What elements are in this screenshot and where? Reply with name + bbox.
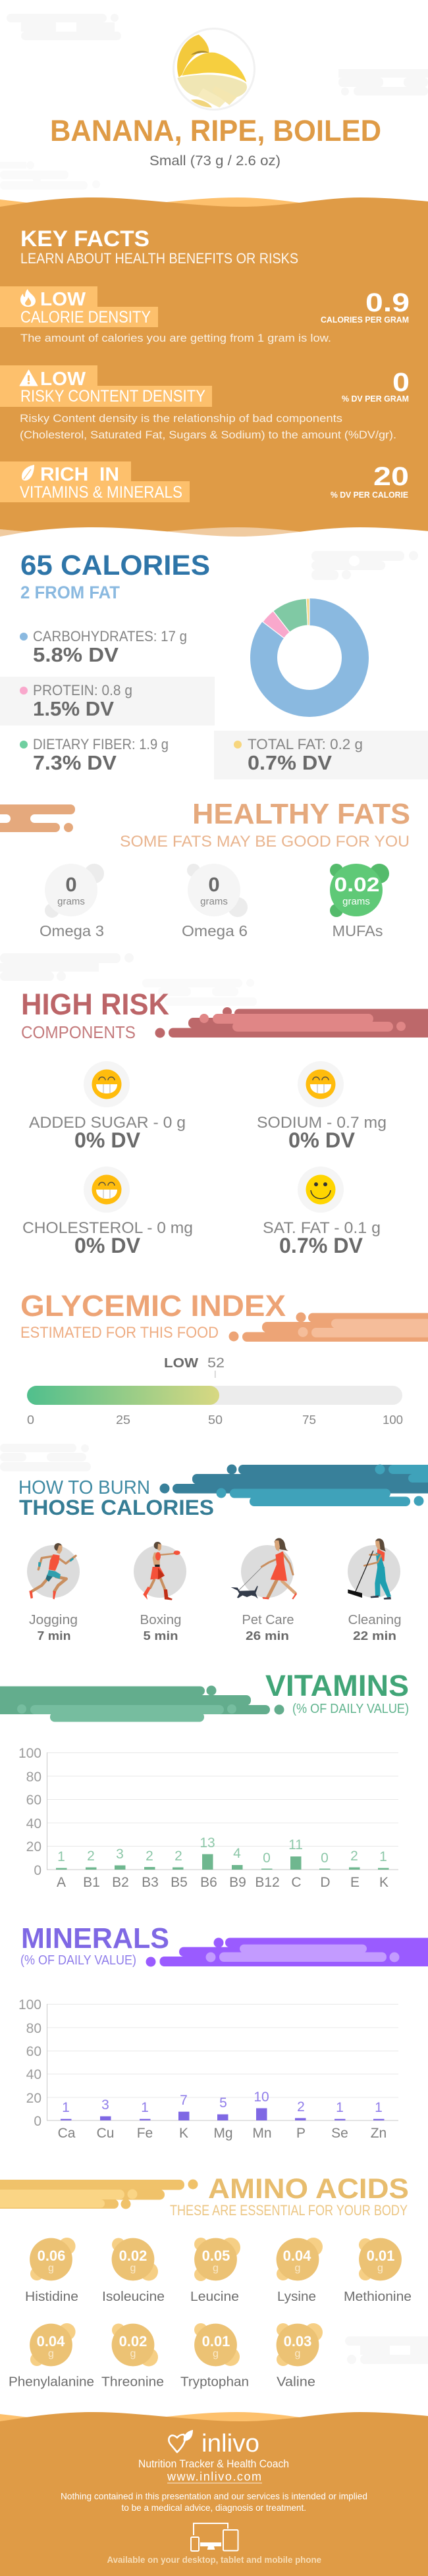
heading: key facts: KEY FACTS [20,226,149,251]
component: saturated fat: SAT. FAT - 0.1 g [263,1219,381,1237]
component: saturated fat: 0.7% DV [279,1234,363,1257]
subheading: ESTIMATED FOR THIS FOOD [20,1324,219,1342]
heading: amino acids: AMINO ACIDS [208,2173,409,2205]
amino acid: methionine [344,2238,412,2304]
bar chart: vitamins: 4 [233,1846,241,1861]
decorative header bar [159,1464,428,1506]
bar chart: minerals: Se [331,2126,348,2141]
bar chart: minerals: 100 [18,1997,41,2012]
bar chart: minerals: Fe [137,2126,153,2141]
metric: MUFAs: MUFAs [332,922,383,939]
icon: devices [191,2523,238,2551]
amino acid: methionine: 0.01 [367,2247,394,2264]
fact: rich in vitamins and minerals [0,461,409,502]
fact: risky content density [0,365,410,441]
bar chart: vitamins: 0 [321,1851,329,1866]
donut chart: macronutrients [263,598,356,703]
activity: cleaning: 22 min [353,1629,396,1643]
bar chart: minerals: 10 [254,2090,269,2105]
decorative header bar [146,1938,428,1967]
amino acid: tryptophan [180,2323,249,2390]
subheading: (% OF DAILY VALUE) [292,1702,409,1716]
bar chart: vitamins: A [57,1875,66,1890]
gauge value: LOW [164,1356,198,1371]
component: sodium: 0% DV [288,1128,356,1152]
activity: cleaning: Cleaning [348,1613,402,1627]
gauge scale: 0 [27,1413,34,1427]
component: cholesterol [22,1167,193,1257]
subheading: LEARN ABOUT HEALTH BENEFITS OR RISKS [20,250,298,267]
amino acid: methionine: g [377,2263,383,2274]
fact: calorie density: 0.9 [365,288,410,317]
icon: smile face [306,1174,336,1205]
activity: pet care: 26 min [246,1629,289,1643]
heading: glycemic index: GLYCEMIC INDEX [20,1289,286,1323]
fact: risky content density: 0 [392,368,410,397]
bar chart: vitamins: 80 [26,1770,41,1785]
activity: boxing [134,1542,186,1643]
panel: amino acids [0,2173,412,2390]
bar chart: vitamins: B1 [83,1875,100,1890]
bar chart: minerals: 80 [26,2021,41,2036]
activity: boxing: 5 min [144,1629,178,1643]
availability note: Available on your desktop, tablet and mobile phone [107,2554,321,2565]
disclaimer: Nothing contained in this presentation and our services is intended or implied [61,2491,367,2502]
bar chart: vitamins: 3 [116,1847,124,1862]
amino acid: lysine: g [295,2263,300,2274]
panel: key facts [0,197,428,537]
decorative header bar [229,1313,428,1342]
amino acid: tryptophan: Tryptophan [180,2375,249,2390]
bar chart: minerals: Cu [97,2126,114,2141]
gauge value: 52 [207,1355,225,1371]
gauge scale: 25 [116,1413,130,1427]
legend: dietary fiber: DIETARY FIBER: 1.9 g [33,736,169,752]
amino acid: leucine: Leucine [190,2290,239,2304]
bar chart: minerals: 5 [219,2095,227,2111]
bar chart: vitamins: K [379,1875,388,1890]
legend: protein [0,677,215,725]
bar chart: minerals: Mn [252,2126,272,2141]
bar chart: vitamins: B12 [255,1875,280,1890]
legend: total fat [214,731,428,779]
amino acid: lysine [277,2238,323,2304]
icon: flame [20,289,36,307]
subheading: (% OF DAILY VALUE) [20,1953,136,1968]
metric: MUFAs [330,864,389,939]
bar chart: vitamins: 11 [288,1837,303,1853]
bar chart: vitamins: 13 [200,1835,215,1851]
bar chart: vitamins: B5 [171,1875,188,1890]
bar chart: vitamins: 0 [34,1863,41,1878]
title: BANANA, RIPE, BOILED [50,114,381,147]
amino acid: threonine [101,2324,164,2390]
icon: grin face [92,1174,121,1205]
component: cholesterol: 0% DV [74,1234,141,1257]
bar chart: minerals: 1 [375,2100,383,2115]
bar chart: minerals [18,1997,398,2141]
amino acid: threonine: Threonine [101,2375,164,2390]
panel: calories [0,550,428,779]
legend: protein: PROTEIN: 0.8 g [33,682,132,698]
amino acid: tryptophan: 0.01 [202,2333,230,2350]
fact: risky content density: % DV PER GRAM [342,394,409,404]
subheading: SOME FATS MAY BE GOOD FOR YOU [120,833,410,851]
background cloud: amino acids [345,2336,428,2364]
fact: calorie density [0,286,410,344]
bar chart: minerals: Zn [371,2126,387,2141]
amino acid: phenylalanine: 0.04 [37,2333,65,2350]
panel: how to burn those calories [18,1464,428,1643]
panel: minerals [18,1922,428,2141]
disclaimer: to be a medical advice, diagnosis or treatment. [121,2502,306,2513]
heading: high risk: HIGH RISK [21,987,169,1021]
fact: calorie density: The amount of calories you are getting from 1 gram is low. [20,332,331,344]
footer background wave [0,2412,428,2576]
amino acid: valine: Valine [277,2375,315,2390]
fact: calorie density: CALORIE DENSITY [20,308,151,327]
component: sodium: SODIUM - 0.7 mg [257,1114,387,1132]
bar chart: minerals: 3 [101,2097,109,2113]
bar chart: vitamins: 2 [87,1849,95,1864]
amino acid: phenylalanine [9,2323,94,2390]
heading: minerals: MINERALS [21,1922,169,1955]
amino acid: lysine: 0.04 [283,2247,311,2264]
gauge scale: 50 [208,1413,223,1427]
fact: calorie density: LOW [40,289,86,310]
activity: pet care: Pet Care [242,1613,294,1627]
bar chart: minerals: 0 [34,2114,41,2129]
metric: omega 3 [40,864,104,939]
metric: omega 6: grams [200,896,228,907]
bar chart: vitamins: 40 [26,1816,41,1831]
fact: calorie density: CALORIES PER GRAM [321,315,409,325]
metric: omega 6 [182,864,248,939]
food image: banana in circle [174,29,254,109]
background cloud: top left [7,14,121,40]
heading: healthy fats: HEALTHY FATS [192,798,410,830]
metric: omega 3: grams [57,896,85,907]
icon: leaf [22,465,34,481]
panel: glycemic index [20,1289,428,1427]
bar chart: vitamins: 60 [26,1793,41,1808]
legend: dietary fiber [20,736,169,774]
component: saturated fat [263,1167,381,1257]
gauge scale: 100 [383,1413,403,1427]
decorative header bar [0,2179,198,2209]
background cloud: calories [311,551,418,580]
fact: rich in vitamins and minerals: RICH IN [40,464,119,485]
bar chart: vitamins: 2 [146,1849,153,1864]
heading: 65 calories: 65 CALORIES [20,550,210,581]
amino acid: lysine: Lysine [277,2290,316,2304]
bar chart: minerals: 60 [26,2044,41,2059]
fact: rich in vitamins and minerals: % DV PER CALORIE [331,490,408,500]
amino acid: histidine [25,2238,78,2304]
amino acid: phenylalanine: Phenylalanine [9,2375,94,2390]
legend: carbohydrates: 5.8% DV [33,643,119,666]
amino acid: phenylalanine: g [48,2348,54,2359]
amino acid: isoleucine [102,2238,165,2304]
subheading: components: COMPONENTS [21,1022,136,1042]
bar chart: vitamins: B9 [229,1875,246,1890]
metric: MUFAs: 0.02 [334,873,379,896]
metric: omega 6: 0 [208,873,220,896]
activity: jogging: 7 min [37,1629,71,1643]
icon: grin face [92,1069,121,1099]
subheading: from fat: 2 FROM FAT [20,583,120,602]
panel: high risk components [21,987,428,1257]
bar chart: vitamins: E [350,1875,360,1890]
panel: healthy fats [0,798,410,939]
heading: vitamins: VITAMINS [265,1669,409,1702]
component: cholesterol: CHOLESTEROL - 0 mg [22,1219,193,1237]
heading: those calories: THOSE CALORIES [19,1496,214,1519]
panel background wave [0,197,428,537]
bar chart: vitamins: 100 [18,1746,41,1761]
icon: boxer [143,1542,180,1600]
bar chart: minerals: P [296,2126,306,2141]
bar chart: vitamins: B2 [112,1875,129,1890]
bar chart: minerals: 2 [297,2099,305,2115]
fact: risky content density: (Cholesterol, Saturated Fat, Sugars & Sodium) to the amount (%DV/gr). [20,429,396,441]
amino acid: histidine: Histidine [25,2290,78,2304]
bar chart: minerals: Ca [58,2126,76,2141]
bar chart: vitamins: 2 [174,1849,182,1864]
fact: risky content density: RISKY CONTENT DENSITY [20,387,205,406]
fact: risky content density: LOW [40,369,86,390]
bar chart: vitamins: B3 [142,1875,159,1890]
fact: rich in vitamins and minerals: VITAMINS & MINERALS [20,483,182,502]
icon: woman walking dog [231,1538,297,1599]
bar chart: vitamins: 2 [350,1849,358,1864]
bar chart: vitamins [18,1746,398,1890]
gauge scale [27,1413,403,1427]
icon: warning triangle [20,370,38,386]
component: added sugar: 0% DV [74,1128,141,1152]
icon: jogger [29,1543,76,1599]
logo: inlivo: inlivo [201,2430,259,2458]
gauge bar [27,1386,402,1405]
amino acid: valine [277,2323,323,2390]
fact: rich in vitamins and minerals: 20 [373,462,409,491]
metric: MUFAs: grams [342,896,370,907]
serving subtitle: Small (73 g / 2.6 oz) [149,153,281,169]
tagline: Nutrition Tracker & Health Coach [138,2458,289,2470]
legend: total fat: 0.7% DV [248,751,332,774]
activity: pet care [231,1538,297,1643]
logo: inlivo [169,2430,259,2458]
bar chart: vitamins: B6 [200,1875,217,1890]
activity: jogging: Jogging [29,1613,78,1627]
legend: carbohydrates: CARBOHYDRATES: 17 g [33,628,187,644]
background cloud: top right [338,69,428,95]
heading: how to burn: HOW TO BURN [18,1477,150,1498]
component: added sugar [29,1061,186,1152]
bar chart: minerals: 20 [26,2091,41,2106]
amino acid: threonine: g [130,2348,136,2359]
icon: grin face [306,1069,336,1099]
amino acid: valine: 0.03 [284,2333,311,2350]
metric: omega 3: Omega 3 [40,922,104,939]
amino acid: leucine: 0.05 [202,2247,230,2264]
amino acid: valine: g [295,2348,300,2359]
legend: carbohydrates [20,628,187,666]
gauge value [164,1355,225,1378]
legend: dietary fiber: 7.3% DV [33,751,117,774]
activity: jogging [27,1543,80,1643]
bar chart: minerals: 1 [141,2100,149,2115]
bar chart: vitamins: 20 [26,1839,41,1854]
legend: protein: 1.5% DV [33,697,114,720]
amino acid: isoleucine: g [130,2263,136,2274]
disclaimer [61,2491,367,2513]
component: sodium [257,1061,387,1152]
amino acid: histidine: g [48,2263,54,2274]
background cloud: left of band [0,161,100,190]
bar chart: minerals: 1 [62,2100,70,2115]
amino acid: tryptophan: g [213,2348,219,2359]
bar chart: vitamins: 1 [379,1849,387,1864]
activity: boxing: Boxing [140,1613,182,1627]
icon: woman with broom [348,1538,391,1600]
activity: cleaning [348,1538,402,1643]
background cloud: high risk [142,979,257,1006]
bar chart: vitamins: 0 [263,1851,271,1866]
legend: total fat: TOTAL FAT: 0.2 g [248,736,363,752]
decorative header bar [155,1007,428,1038]
amino acid: isoleucine: Isoleucine [102,2290,165,2304]
bar chart: vitamins: D [320,1875,331,1890]
decorative header bar [0,1685,284,1722]
bar chart: minerals: 7 [180,2093,188,2108]
component: added sugar: ADDED SUGAR - 0 g [29,1114,186,1132]
amino acid: isoleucine: 0.02 [119,2247,147,2264]
metric: omega 3: 0 [65,873,77,896]
bar chart: vitamins: 1 [57,1849,65,1864]
bar chart: minerals: 40 [26,2067,41,2082]
amino acid: methionine: Methionine [344,2290,412,2304]
background cloud: between fats and risk [0,953,134,981]
bar chart: vitamins: C [291,1875,302,1890]
icon: heart with leaf [169,2430,193,2452]
amino acid: leucine [190,2238,240,2304]
bar chart: minerals: 1 [336,2100,344,2115]
bar chart: minerals: Mg [213,2126,233,2141]
background cloud: burn calories [0,1444,91,1471]
gauge scale: 75 [302,1413,316,1427]
amino acid: histidine: 0.06 [38,2247,65,2264]
website link: www.inlivo.com [167,2470,261,2483]
metric: omega 6: Omega 6 [182,922,248,939]
panel: vitamins [0,1669,409,1890]
panel: footer [0,2412,428,2576]
amino acid: threonine: 0.02 [119,2333,147,2350]
fact: risky content density: Risky Content density is the relationship of bad components [20,412,342,425]
amino acid: leucine: g [213,2263,219,2274]
bar chart: minerals: K [179,2126,188,2141]
decorative header bar [0,804,75,832]
